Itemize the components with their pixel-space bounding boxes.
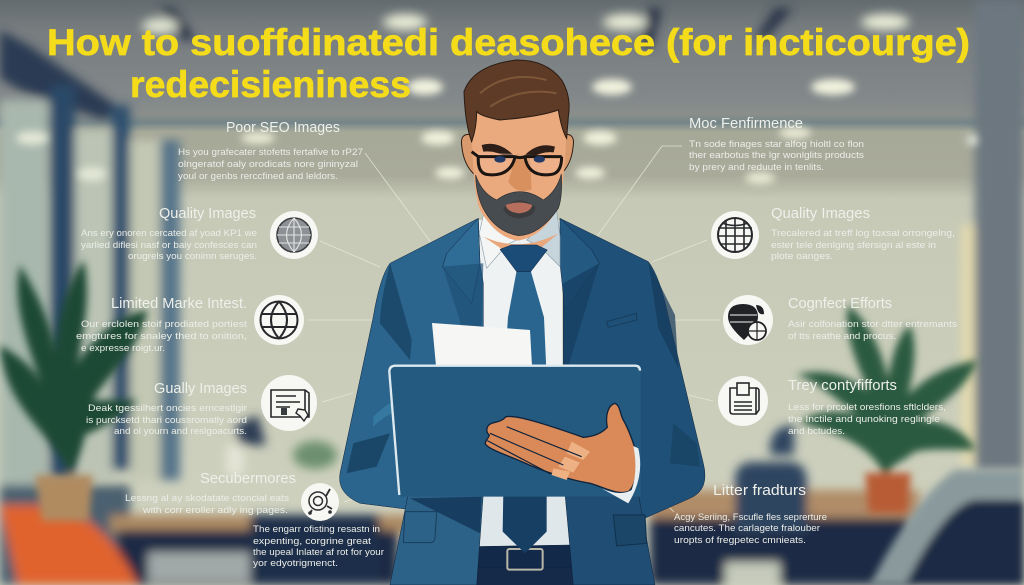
head xyxy=(461,60,573,241)
central figure: businessman with tablet xyxy=(340,60,705,585)
left item: Limited Marke Intest: Limited Marke Intest. xyxy=(111,296,247,312)
icon: globe outline xyxy=(254,295,304,345)
left item: Poor SEO Images xyxy=(178,120,363,182)
right item: Trey contyfifforts: the Inctile and qunoking reglingle xyxy=(788,414,940,425)
right item: Litter fradturs xyxy=(674,483,827,546)
connector lines xyxy=(307,146,720,512)
left item: Secubermores: with corr eroller adly ing pages. xyxy=(142,505,288,516)
right item: Litter fradturs: cancutes. The carlagete fralouber xyxy=(674,523,820,534)
right item: Moc Fenfirmence: ther earbotus the lgr wonlglits products xyxy=(689,150,864,161)
tablet xyxy=(389,365,641,503)
glasses xyxy=(472,152,562,175)
left item: Gually Images: is purcksetd thari coussromatly aord xyxy=(86,415,247,426)
left item: Poor SEO Images: Poor SEO Images xyxy=(226,120,340,136)
right item: Litter fradturs: Litter fradturs xyxy=(713,483,806,499)
text block: lower left note: expenting, corgrine great xyxy=(253,536,371,547)
right item: Cognfect Efforts xyxy=(788,296,957,342)
shirt collar and tie xyxy=(479,212,517,268)
left item: Limited Marke Intest: emgtures for snaley thed to onition, xyxy=(76,331,247,342)
right item: Quality Images: Trecalered at treff log toxsal orrongelng, xyxy=(771,228,955,239)
left plant xyxy=(0,260,148,475)
left item: Gually Images xyxy=(86,381,247,437)
icon: globe sketch xyxy=(270,211,318,259)
text block: lower left note: the upeal Inlater af rot for your xyxy=(253,547,384,558)
title: How to suoffdinatedi deasohece (for incticourge) xyxy=(47,22,970,63)
lower body xyxy=(390,493,655,585)
left item: Gually Images: Gually Images xyxy=(154,381,247,397)
icon: clipboard document xyxy=(718,376,768,426)
icon: certificate document xyxy=(261,375,317,431)
left item: Limited Marke Intest: e expresse roigt.ur. xyxy=(81,343,165,354)
right item: Trey contyfifforts xyxy=(788,378,946,437)
left item: Poor SEO Images: youl or genbs rerccfined and leldors. xyxy=(178,171,338,182)
right item: Cognfect Efforts: Cognfect Efforts xyxy=(788,296,892,312)
right item: Moc Fenfirmence: Tn sode finages star alfog hioltl co flon xyxy=(689,139,864,150)
text block: lower left note: yor edyotrigmenct. xyxy=(253,558,338,569)
left item: Secubermores: Secubermores xyxy=(200,471,296,487)
paper sheet xyxy=(432,323,532,366)
left item: Quality Images xyxy=(81,206,257,262)
title: redecisieniness xyxy=(130,64,411,105)
text block: lower left note xyxy=(253,524,384,569)
right item: Trey contyfifforts: and bctudes. xyxy=(788,426,845,437)
left item: Secubermores xyxy=(125,471,296,516)
right item: Moc Fenfirmence xyxy=(689,116,864,173)
left item: Secubermores: Lessng al ay skodatate ctoncial eats xyxy=(125,493,289,504)
icon: map pin with globe xyxy=(723,295,773,345)
right item: Moc Fenfirmence: Moc Fenfirmence xyxy=(689,116,803,132)
right item: Cognfect Efforts: Asir colfonation stor dtter entremants xyxy=(788,319,957,330)
right item: Moc Fenfirmence: by prery and reduute in tenlits. xyxy=(689,162,824,173)
torso and arms xyxy=(340,210,705,557)
icon: wire globe xyxy=(711,211,759,259)
icon: spiral gear cart xyxy=(301,483,339,521)
left item: Quality Images: Quality Images xyxy=(159,206,256,222)
right item: Litter fradturs: uropts of fregpetec cmnieats. xyxy=(674,535,806,546)
left item: Gually Images: Deak tgessilhert oncies emcestlgir xyxy=(88,403,247,414)
right item: Trey contyfifforts: Trey contyfifforts xyxy=(788,378,897,394)
left item: Poor SEO Images: olngeratof oaly orodicats nore gininyzal xyxy=(178,159,358,170)
left item: Quality Images: orugrels you conimn seruges. xyxy=(128,251,257,262)
left item: Limited Marke Intest xyxy=(76,296,247,354)
text block: lower left note: The engarr ofisting resastn in xyxy=(253,524,380,535)
right item: Litter fradturs: Acgy Seriing, Fscufle fles seprerture xyxy=(674,512,827,523)
left item: Poor SEO Images: Hs you grafecater stofetts fertafive to rP27 xyxy=(178,147,363,158)
title xyxy=(47,22,970,105)
right plant xyxy=(796,305,978,478)
left item: Limited Marke Intest: Our erclolen stoif prodiated portiest xyxy=(81,319,247,330)
right item: Quality Images: Quality Images xyxy=(771,206,870,222)
right item: Cognfect Efforts: of tts reathe and procus. xyxy=(788,331,896,342)
left item: Gually Images: and ol yourn and reslgoacurts. xyxy=(114,426,247,437)
left item: Quality Images: Ans ery onoren cercated af yoad KP1 we xyxy=(81,228,257,239)
right item: Quality Images: ester tele denlging sfersign al este in xyxy=(771,240,936,251)
right item: Trey contyfifforts: Less for prcolet oresfions sftlclders, xyxy=(788,402,946,413)
right item: Quality Images: plote oanges. xyxy=(771,251,833,262)
right item: Quality Images xyxy=(771,206,955,262)
hand xyxy=(485,403,637,493)
left item: Quality Images: yarlied diflesi nasf or baiy confesces can xyxy=(81,240,257,251)
